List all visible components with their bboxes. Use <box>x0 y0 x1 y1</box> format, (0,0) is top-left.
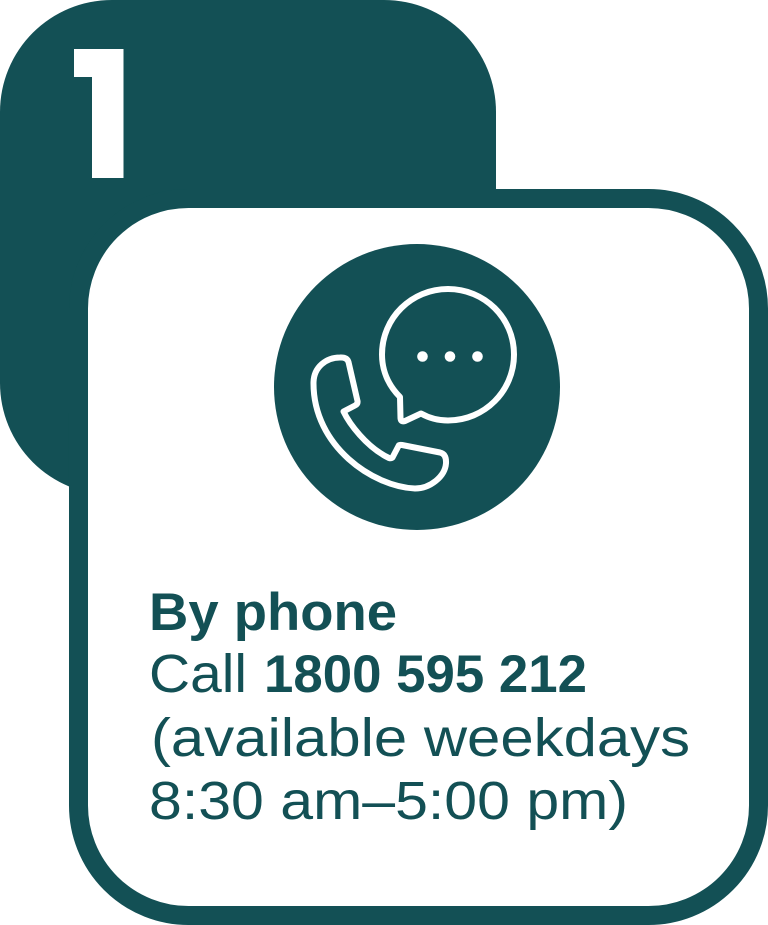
panel: front card <box>78 198 758 916</box>
text: call label: Call <box>149 644 247 704</box>
text: hours: 8:30 am–5:00 pm) <box>149 771 628 831</box>
icon: telephone handset <box>314 357 446 488</box>
heading: by phone: By phone <box>149 583 397 642</box>
text: phone number: 1800 595 212 <box>264 645 587 704</box>
text block: contact details <box>149 583 690 831</box>
step number: 1 <box>56 17 154 216</box>
text: availability: (available weekdays <box>151 708 690 768</box>
icon: speech bubble <box>382 289 514 421</box>
icon background circle <box>274 244 560 530</box>
icon: speech dots <box>417 351 483 362</box>
icon: phone with speech bubble <box>274 244 560 530</box>
panel: back number tab <box>0 0 496 495</box>
